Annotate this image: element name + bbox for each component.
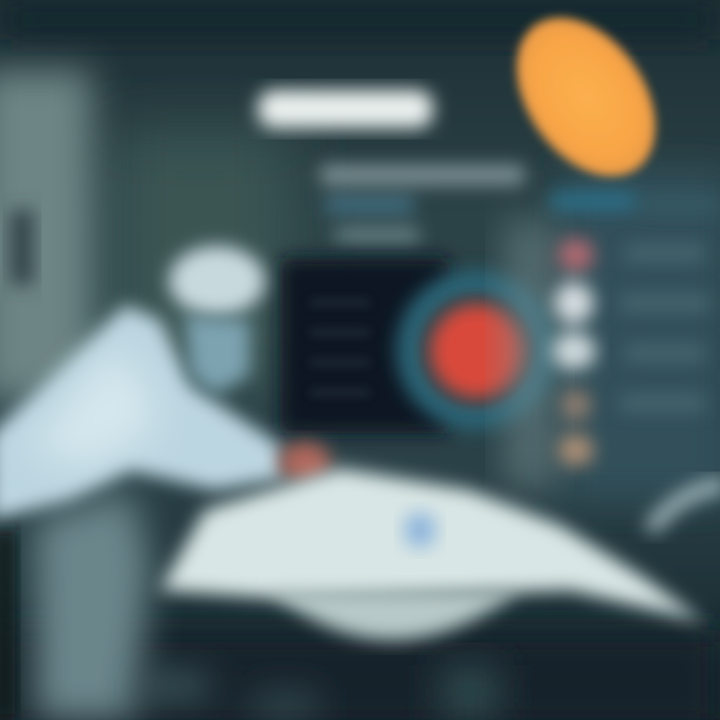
surgeon cap [169,246,265,316]
floor objects [140,665,500,720]
icon column [552,238,596,466]
orange surgical lamp [488,0,684,202]
surgeon gown [0,305,285,520]
target ring and red core [396,270,556,430]
curved tube [650,485,720,530]
surgeon lower body [35,490,150,720]
gloved hand [279,442,331,482]
ceiling light [258,90,433,128]
dark data panel [280,258,450,433]
left wall panel [0,70,92,400]
surgeon [0,246,331,720]
surgeon face and mask [185,315,250,395]
operating table sheet [160,468,705,640]
wall panel mark [10,210,34,285]
blurred heading text [320,165,720,242]
vertical column [505,220,555,490]
right side structure lines [620,245,710,411]
